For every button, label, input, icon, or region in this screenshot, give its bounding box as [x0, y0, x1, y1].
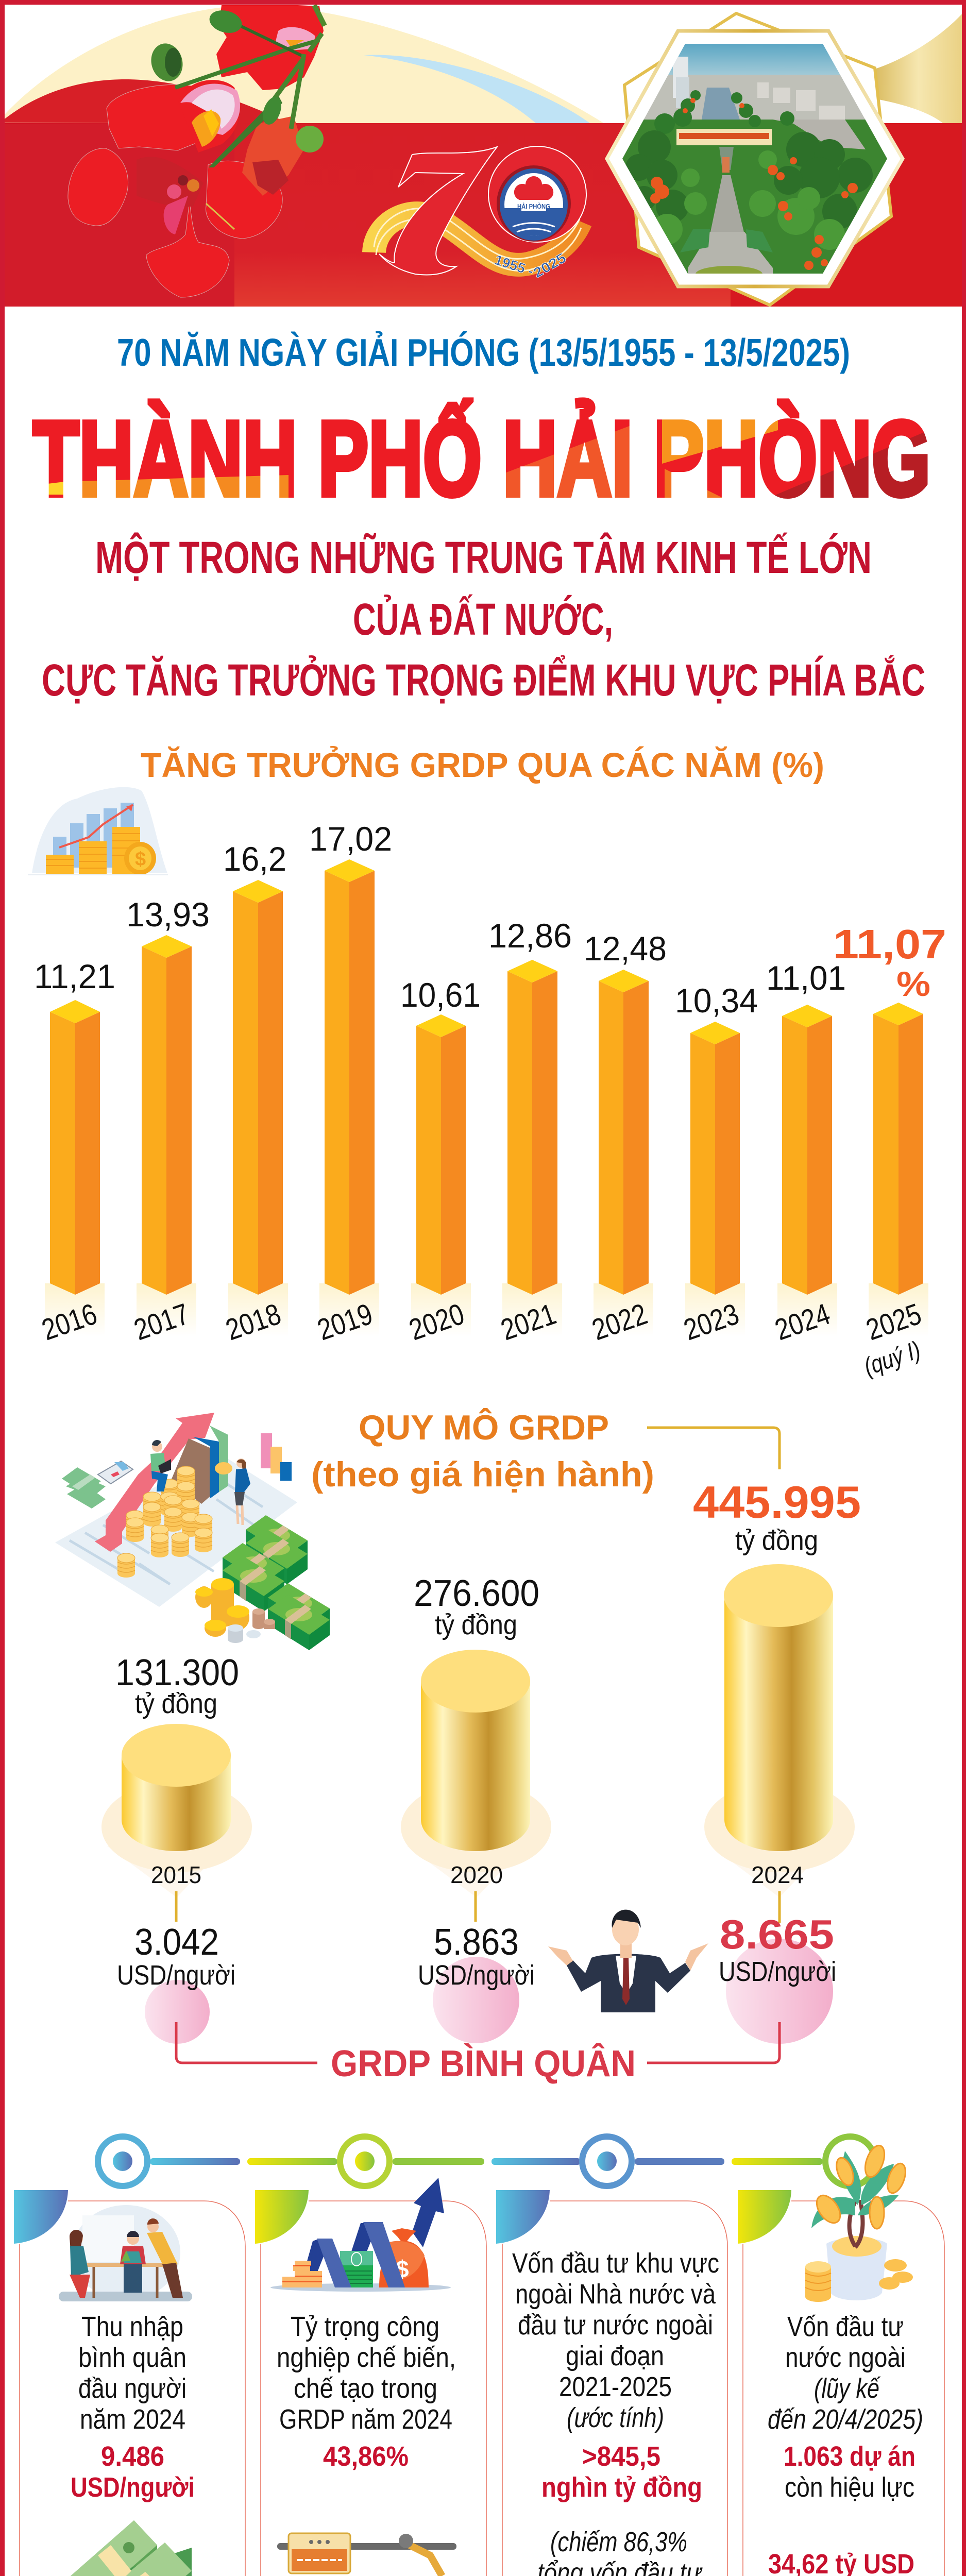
value: processing share: 43,86% [323, 2441, 409, 2472]
heading: GRDP scale: (theo giá hiện hành) [311, 1455, 654, 1494]
bar chart [34, 820, 946, 1381]
text: investment label: giai đoạn [566, 2341, 664, 2371]
year labels: 2017 [130, 1297, 193, 1347]
icon: coins and chart [28, 787, 168, 875]
text: FDI label: nước ngoài [785, 2342, 906, 2373]
gold swoosh [871, 9, 966, 123]
text: investment share: (chiếm 86,3% [550, 2527, 687, 2557]
bar values: 17,02 [309, 820, 392, 858]
value 2015 [115, 1652, 239, 1719]
logo: 70 years [374, 146, 586, 281]
highlighted value 2025: 11,07 [833, 921, 946, 967]
text: investment label: (ước tính) [567, 2402, 664, 2433]
card: income [14, 2190, 245, 2576]
subtitle: CỦA ĐẤT NƯỚC, [353, 595, 613, 645]
bar 2019 [325, 859, 375, 1295]
text: income label [78, 2311, 187, 2435]
bar values: 11,01 [766, 959, 846, 997]
cylinder 2015: 2015 [151, 1861, 201, 1888]
text: processing label: nghiệp chế biến, [277, 2342, 456, 2373]
year labels: 2022 [588, 1297, 651, 1347]
bar 2016 [50, 1000, 100, 1295]
text: income label: bình quân [78, 2342, 187, 2373]
value per capita 2020: 5.863 [434, 1922, 519, 1963]
bar 2021 [507, 960, 557, 1295]
bar 2020 [416, 1014, 466, 1295]
illustration: stacks of cash [71, 2520, 218, 2576]
text: income label: năm 2024 [80, 2404, 185, 2435]
value 2020: tỷ đồng [435, 1609, 517, 1640]
highlighted value 2025 [833, 921, 946, 1004]
illustration: office team [59, 2205, 192, 2301]
bar values: 11,21 [34, 957, 115, 995]
value 2020 [414, 1573, 539, 1640]
illustration: money plant [805, 2143, 913, 2302]
cream wave [0, 5, 604, 123]
cylinder 2020 [401, 1650, 551, 1897]
logo: 70 years: HẢI PHÒNG [517, 202, 550, 210]
highlighted value 2024: tỷ đồng [735, 1525, 818, 1556]
card: private and FDI investment [496, 2190, 727, 2576]
value: income [71, 2441, 195, 2503]
value: investment: >845,5 [582, 2441, 660, 2472]
text: processing label: GRDP năm 2024 [279, 2404, 452, 2435]
year labels: (quý I) [860, 1336, 924, 1381]
highlighted value 2025: % [896, 964, 930, 1004]
year labels: 2016 [38, 1297, 101, 1347]
bar values: 12,86 [488, 917, 572, 955]
panel: GRDP scale [55, 1408, 861, 2084]
text: investment label: ngoài Nhà nước và [515, 2279, 716, 2310]
text: investment label: 2021-2025 [559, 2371, 672, 2402]
year labels: 2024 [771, 1297, 834, 1347]
heading: GRDP growth: TĂNG TRƯỞNG GRDP QUA CÁC NĂM (%) [141, 746, 824, 785]
text: income label: Thu nhập [81, 2311, 183, 2342]
value: income: USD/người [71, 2472, 195, 2503]
value: FDI projects: 1.063 dự án [784, 2441, 916, 2472]
bar values: 13,93 [126, 895, 210, 934]
card: processing industry [255, 2178, 486, 2576]
icon: back hexagon frame [624, 13, 891, 305]
illustration: factory robot [276, 2533, 467, 2576]
panel: GRDP growth chart [28, 746, 946, 1381]
illustration: growth and money [55, 1413, 330, 1650]
illustration: businessman [548, 1910, 708, 2012]
photo: city aerial view [618, 44, 891, 282]
pink ellipses [145, 1939, 833, 2044]
value: income: 9.486 [101, 2441, 164, 2472]
value: investment [541, 2441, 702, 2503]
panel: banner [0, 5, 966, 307]
highlighted value 2024 [693, 1477, 861, 1556]
logo: 70 years: 1955 - [493, 252, 536, 279]
value 2015: 131.300 [115, 1652, 239, 1693]
red band [0, 79, 966, 307]
text: processing label [277, 2311, 456, 2435]
value per capita 2020: USD/người [418, 1960, 535, 1991]
icon: phoenix flower [68, 5, 325, 297]
value 2020: 276.600 [414, 1573, 539, 1614]
text: investment label: Vốn đầu tư khu vực [512, 2248, 719, 2279]
year labels: 2018 [222, 1297, 285, 1347]
bar values [34, 820, 846, 1020]
bar values: 10,34 [675, 981, 758, 1020]
cylinder 2020: 2020 [450, 1861, 503, 1888]
text: investment label [512, 2248, 719, 2433]
value per capita 2024: 8.665 [720, 1911, 834, 1957]
connector: per capita [176, 2022, 779, 2063]
value 2015: tỷ đồng [135, 1688, 217, 1719]
icon: coins and chart: $ [135, 849, 146, 870]
bar 2017 [142, 935, 192, 1295]
illustration: growth arrow and money: $ [396, 2256, 409, 2282]
text: FDI label: đến 20/4/2025) [768, 2404, 923, 2435]
year labels: 2021 [497, 1297, 560, 1347]
connector ticks [176, 1891, 779, 1923]
bar 2018 [233, 880, 283, 1295]
value: FDI projects [784, 2441, 916, 2503]
bar 2023 [690, 1022, 740, 1295]
subtitle [42, 533, 925, 705]
bar values: 10,61 [400, 976, 481, 1014]
icon: front hexagon frame [607, 31, 903, 286]
bar values: 12,48 [584, 929, 667, 968]
value per capita 2024 [719, 1911, 836, 1987]
text: FDI label: Vốn đầu tư [787, 2311, 904, 2342]
panel: economic indicators [14, 2137, 945, 2576]
year label plates [45, 1283, 928, 1336]
highlighted value 2024: 445.995 [693, 1477, 861, 1528]
connector: heading to 2024 [647, 1428, 779, 1469]
text: income label: đầu người [78, 2373, 187, 2404]
year labels: 2020 [405, 1297, 468, 1347]
heading: GRDP per capita: GRDP BÌNH QUÂN [331, 2043, 636, 2084]
logo: 70 years: 2025 [531, 250, 569, 281]
text: investment label: đầu tư nước ngoài [518, 2310, 713, 2341]
value per capita 2015 [117, 1922, 235, 1991]
timeline [98, 2137, 875, 2186]
value per capita 2024: USD/người [719, 1956, 836, 1987]
bar 2022 [599, 970, 649, 1295]
card: foreign investment [738, 2143, 944, 2576]
text: processing label: chế tạo trong [294, 2373, 437, 2404]
year labels: 2025 [862, 1297, 925, 1347]
value per capita 2015: 3.042 [134, 1922, 219, 1963]
illustration: growth arrow and money [270, 2178, 451, 2292]
cylinder 2024: 2024 [751, 1861, 804, 1888]
heading: GRDP scale [311, 1408, 654, 1494]
value: FDI projects: còn hiệu lực [785, 2472, 914, 2503]
bar 2024 [782, 1005, 832, 1295]
bar 2025 [873, 1003, 923, 1295]
year labels: 2019 [313, 1297, 377, 1347]
cylinder 2015 [101, 1724, 252, 1897]
value per capita 2020 [418, 1922, 535, 1991]
text: processing label: Tỷ trọng công [291, 2311, 439, 2342]
year labels [38, 1297, 925, 1381]
light blue swoosh [364, 55, 590, 123]
bar values: 16,2 [223, 840, 286, 878]
text: FDI label [768, 2311, 923, 2435]
cylinder 2024 [704, 1564, 855, 1897]
value per capita 2015: USD/người [117, 1960, 235, 1991]
year labels: 2023 [680, 1297, 743, 1347]
text: investment share [537, 2527, 703, 2576]
heading: GRDP scale: QUY MÔ GRDP [359, 1408, 609, 1447]
value: investment: nghìn tỷ đồng [541, 2472, 702, 2503]
text: FDI label: (lũy kế [814, 2373, 881, 2404]
